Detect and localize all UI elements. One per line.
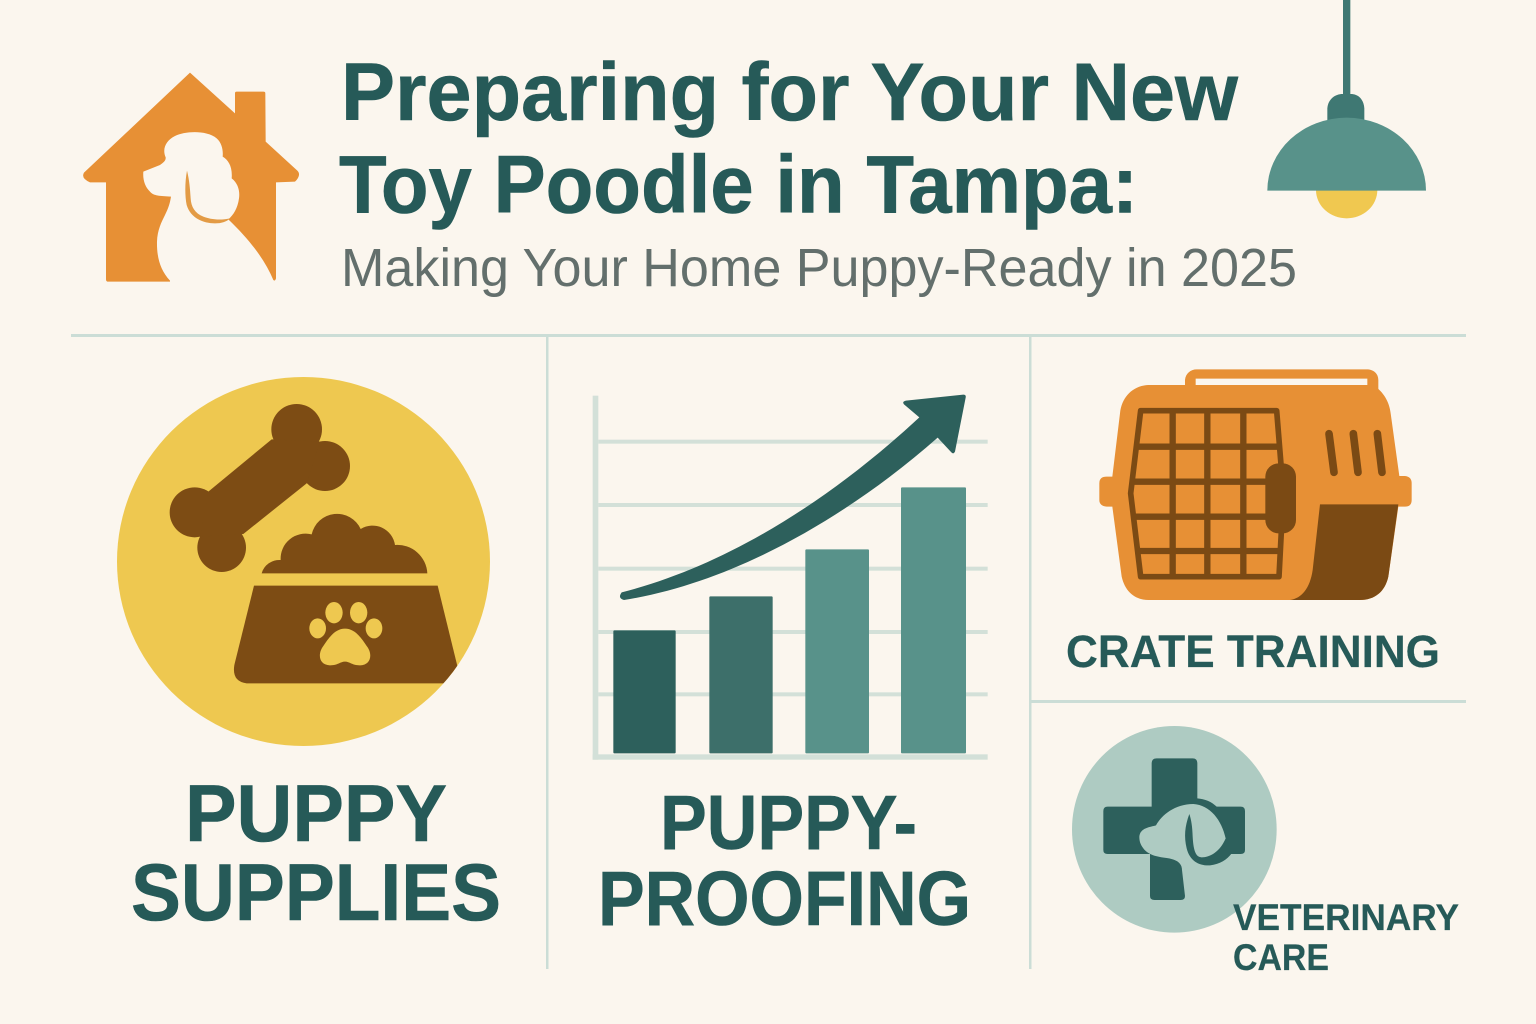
arrow [620, 395, 966, 600]
heading: puppy-proofing: PROOFING [598, 856, 971, 942]
heading: veterinary care: CARE [1233, 937, 1329, 978]
panel: crate training [1066, 369, 1440, 677]
heading: crate training: CRATE TRAINING [1066, 626, 1440, 677]
bar chart with rising arrow [593, 395, 988, 760]
heading: puppy-proofing: PUPPY- [660, 780, 917, 866]
panel: puppy supplies [117, 377, 501, 938]
icon: food bowl and bone [117, 377, 490, 746]
title [339, 47, 1238, 230]
panel: veterinary care [1072, 726, 1459, 978]
heading: puppy supplies: SUPPLIES [131, 848, 501, 938]
heading: puppy supplies: PUPPY [185, 769, 447, 859]
icon: house with poodle silhouette [83, 73, 299, 283]
heading: puppy-proofing [598, 780, 971, 942]
icon: medical cross with dog [1072, 726, 1277, 933]
subtitle: Making Your Home Puppy-Ready in 2025 [341, 238, 1297, 298]
poodle ear line [185, 171, 230, 223]
icon: pet carrier [1099, 369, 1412, 600]
heading: veterinary care [1233, 897, 1459, 978]
icon: hanging lamp [1267, 0, 1426, 218]
heading: puppy supplies [131, 769, 501, 938]
title: Toy Poodle in Tampa: [339, 140, 1138, 230]
heading: veterinary care: VETERINARY [1233, 897, 1459, 938]
divider lines [71, 334, 1466, 969]
header [83, 0, 1426, 298]
title: Preparing for Your New [341, 47, 1238, 138]
panel: puppy-proofing [593, 395, 988, 942]
